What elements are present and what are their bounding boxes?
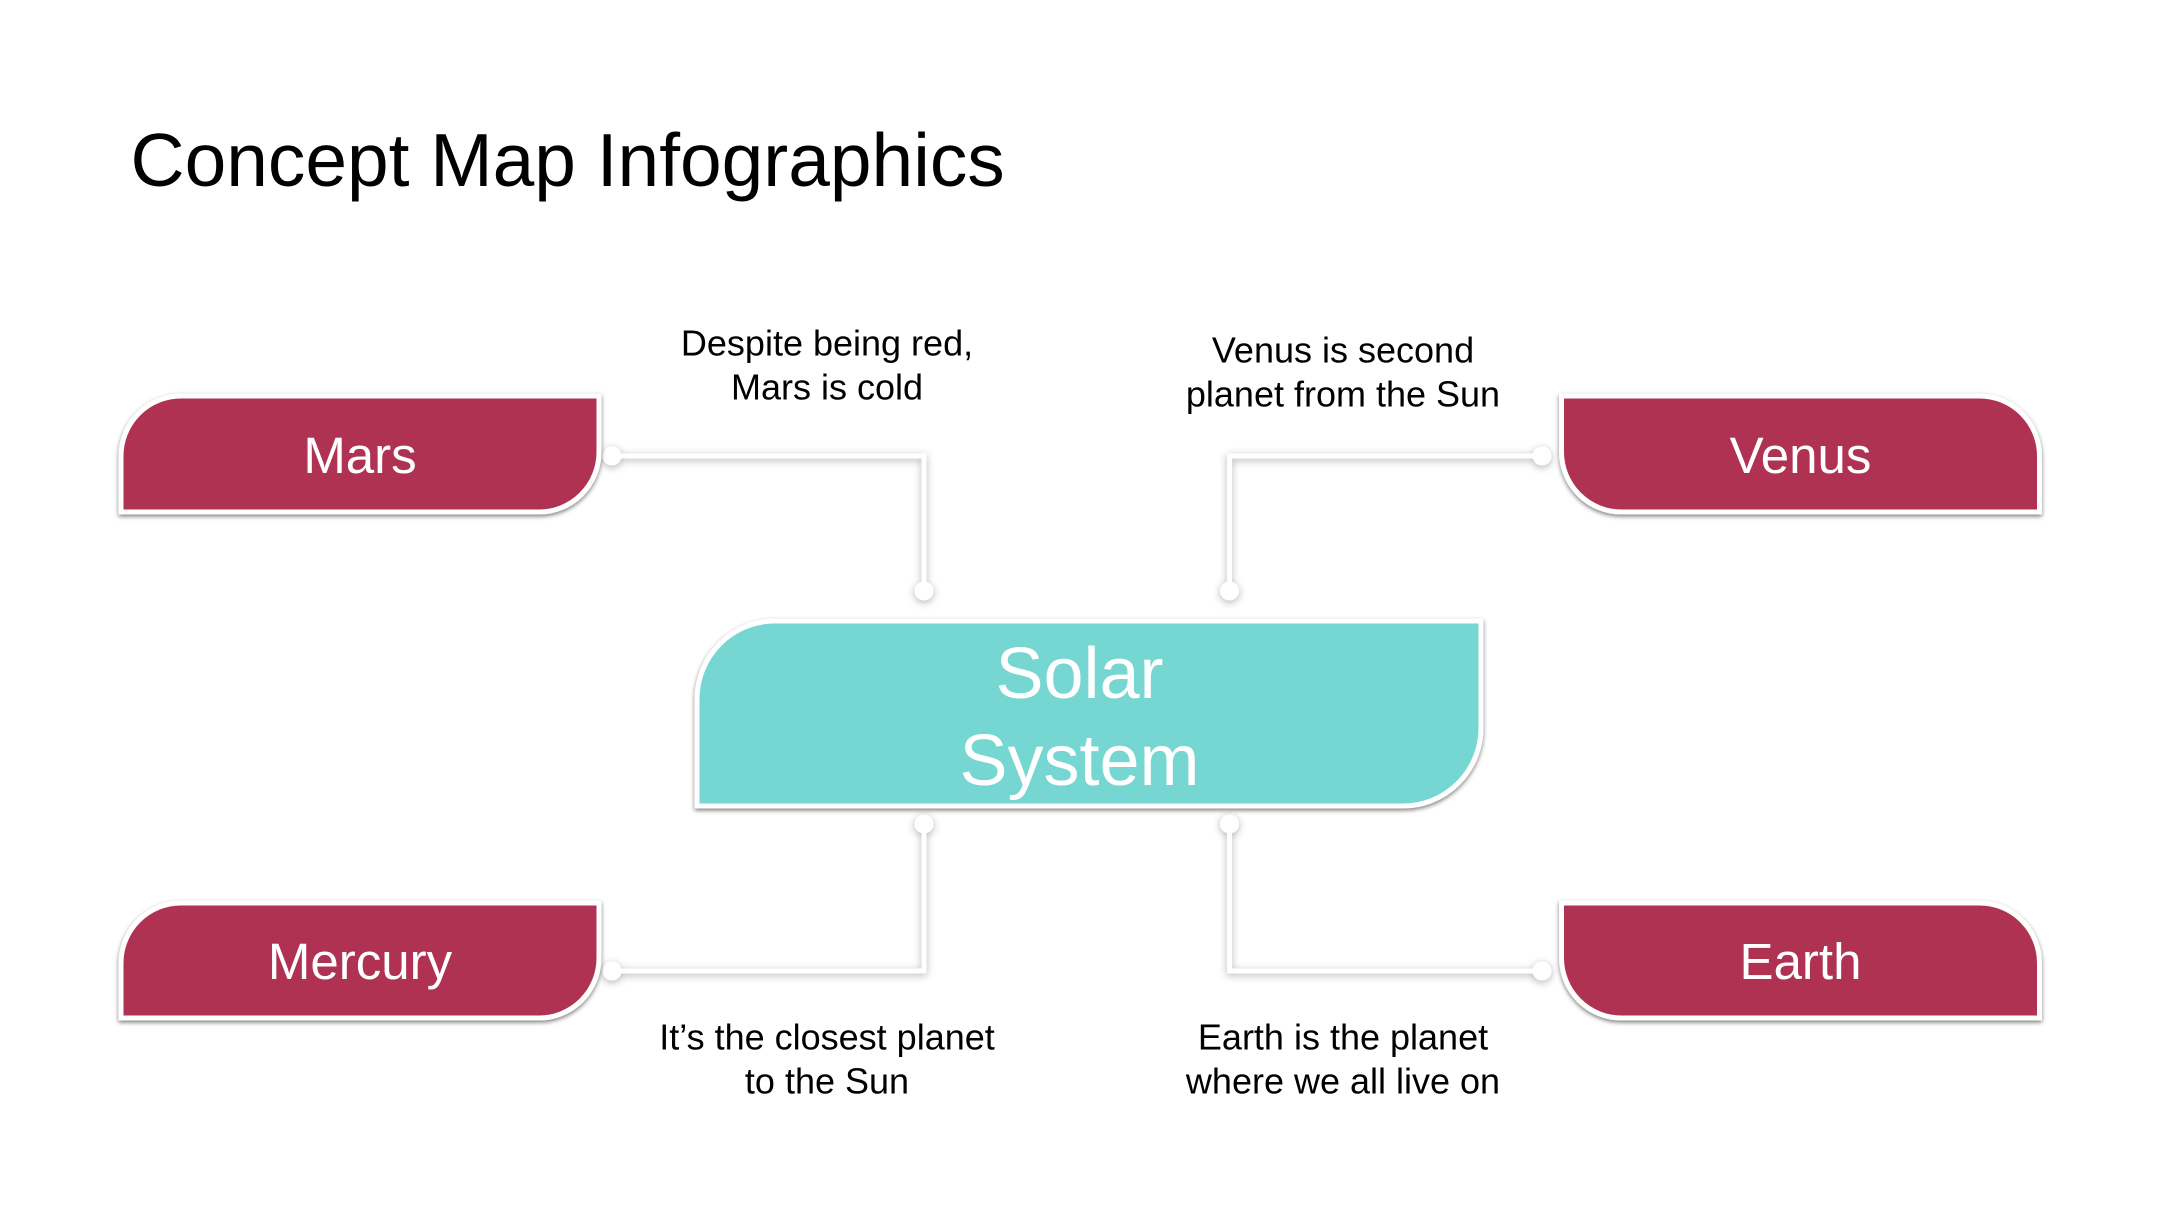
node: Mercury [121,903,599,1018]
text: Mars description: Despite being red, [681,322,973,364]
node: Venus [1562,396,2040,512]
node: Earth [1562,903,2040,1018]
text: Mercury description: to the Sun [745,1060,909,1102]
connector: Mercury to Solar System [602,814,934,980]
connector: Earth to Solar System [1220,814,1552,980]
node: Venus: Venus [1730,427,1871,484]
node: Solar System [697,621,1481,806]
text: Earth description: Earth is the planet [1198,1016,1488,1058]
connector: Venus to Solar System [1220,446,1552,600]
node: Mercury: Mercury [268,933,453,990]
text: Venus description: planet from the Sun [1186,374,1500,414]
node: Solar System: System [959,721,1200,801]
node: Solar System: Solar [995,634,1164,714]
text: Earth description: where we all live on [1185,1060,1500,1102]
node: Mars [121,396,599,512]
title: Concept Map Infographics [130,118,1005,202]
node: Earth: Earth [1740,933,1861,990]
text: Mars description: Mars is cold [731,366,923,408]
node: Mars: Mars [303,427,417,484]
text: Mercury description: It’s the closest planet [659,1016,995,1058]
text: Venus description: Venus is second [1212,330,1474,370]
connector: Mars to Solar System [602,446,934,600]
